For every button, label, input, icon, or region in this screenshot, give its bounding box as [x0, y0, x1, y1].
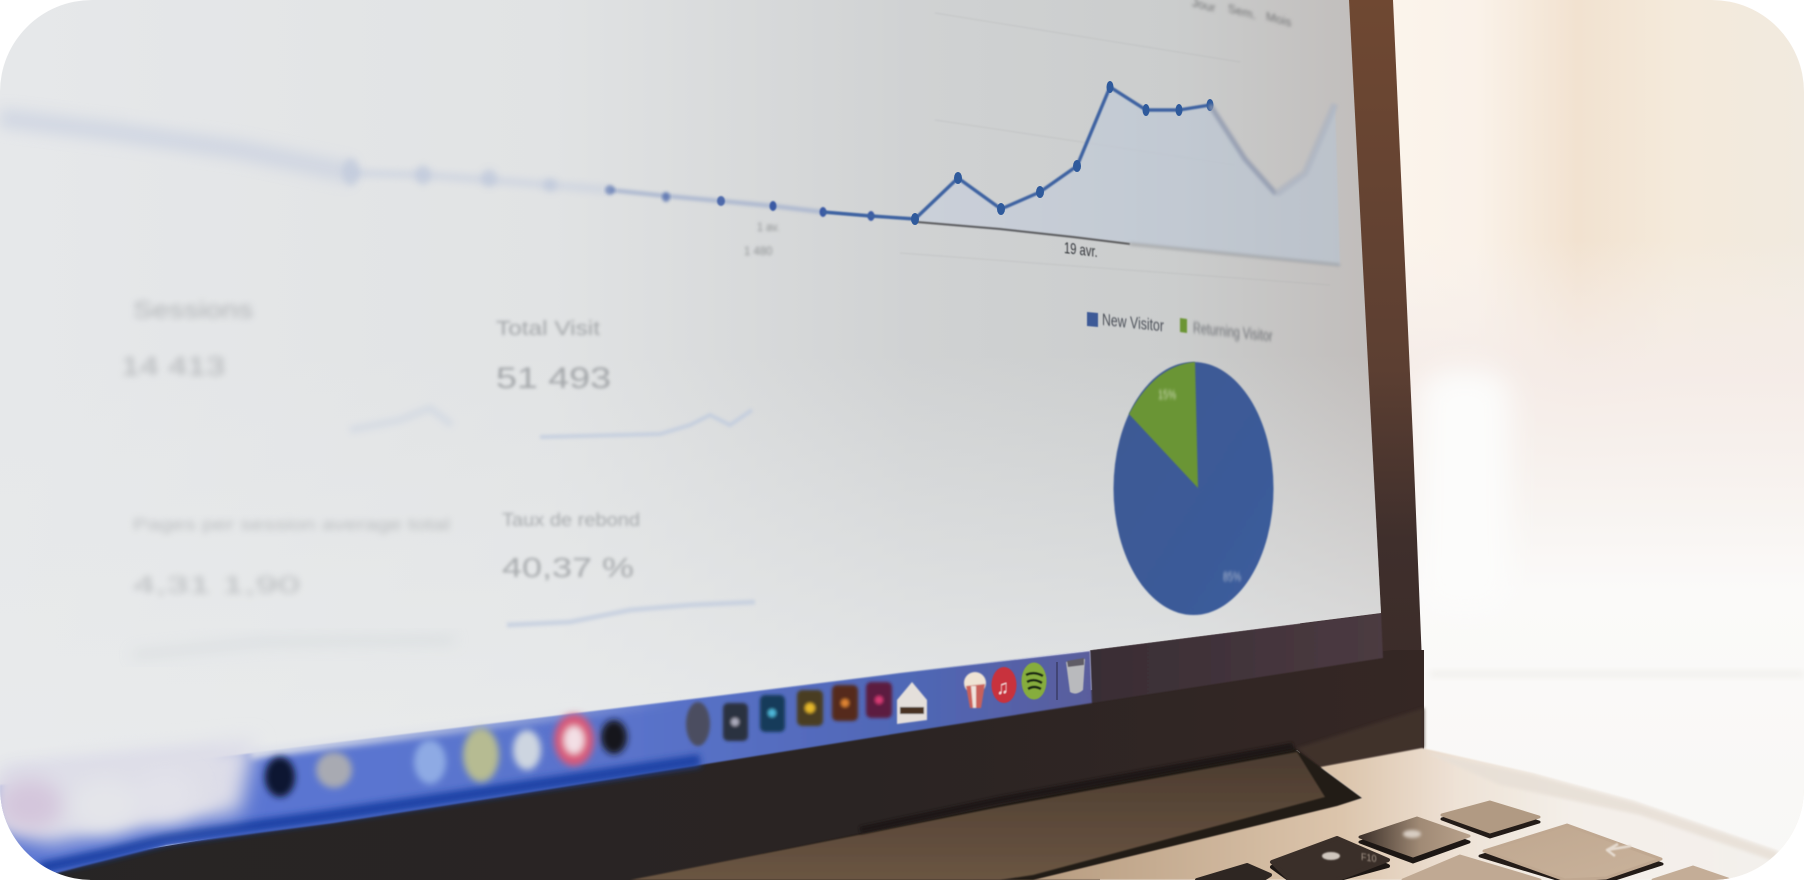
hinge [630, 752, 1325, 880]
dock icon: trash [1066, 658, 1085, 694]
keyboard deck [1000, 748, 1804, 880]
stat: total visit [496, 318, 611, 395]
key: dark function key: F10 [1361, 852, 1376, 865]
dock icon: music: ♫ [997, 676, 1008, 699]
room background [1300, 0, 1804, 880]
dock icons: middle row [686, 682, 892, 746]
stat: sessions: 14 413 [121, 351, 225, 381]
screen [0, 0, 1381, 785]
key: function key tan [1442, 802, 1539, 837]
key: backspace [1480, 825, 1662, 880]
legend swatch: new visitor [1087, 312, 1098, 327]
data line: in focus [823, 81, 1214, 225]
lower lid bezel [0, 650, 1424, 880]
stat: pages per session [133, 515, 450, 599]
sparkline 3 [507, 602, 755, 625]
pie chart [1114, 362, 1274, 615]
stat: bounce rate [502, 510, 640, 583]
legend label: returning visitor: Returning Visitor [1193, 319, 1273, 345]
dock icons: far left, out of focus [265, 714, 627, 797]
hinge shadow [620, 745, 1362, 880]
pie slice label 15%: 15% [1158, 389, 1176, 402]
pie slice: returning visitor 15% [1129, 362, 1198, 488]
dock [0, 651, 1092, 880]
dock top edge blur [250, 701, 680, 754]
sparkline 4 [133, 640, 455, 655]
laptop right bezel [1300, 0, 1424, 770]
blurred sparklines [133, 408, 755, 655]
chart baseline [917, 222, 1340, 265]
area under line [915, 87, 1340, 266]
top right controls: Mois [1266, 9, 1291, 30]
inner bezel panel beside dock [1090, 613, 1383, 703]
key: far left dark [1197, 865, 1270, 880]
stat: pages per session: 4,31 1,90 [133, 572, 300, 599]
legend label: new visitor: New Visitor [1102, 311, 1164, 336]
faint date label: 1 480 [744, 245, 773, 258]
stat: sessions [121, 297, 253, 381]
stat: bounce rate: Taux de rebond [502, 510, 640, 530]
legend swatch: returning visitor [1180, 318, 1187, 333]
pie slice: new visitor 85% [1114, 362, 1274, 615]
legend [1087, 311, 1273, 345]
stat: pages per session: Pages per session average total [133, 515, 450, 534]
stat: total visit: Total Visit [496, 318, 601, 340]
key: volume [1360, 818, 1469, 862]
key: dark function key [1272, 838, 1388, 880]
faint date label [744, 222, 780, 258]
dock icon: mail house [897, 682, 927, 724]
data points: far left blurred [342, 158, 557, 192]
key: lower middle [1403, 856, 1540, 880]
stat: sessions: Sessions [133, 297, 253, 324]
dock icon: popcorn [964, 672, 986, 708]
top right controls: Sem. [1228, 1, 1256, 22]
data points: left [605, 185, 874, 221]
chart grid lines [900, 13, 1330, 285]
key: lower right [1653, 867, 1728, 880]
dock left white blur [0, 740, 255, 844]
blurred statistics [121, 297, 640, 599]
dock icon: spotify [1022, 662, 1046, 700]
dock separator [1056, 662, 1058, 700]
sparkline 2 [540, 410, 752, 437]
lighter band on bottom of lid [1297, 708, 1424, 768]
dock lower blue edge [40, 760, 700, 868]
dock bar: full width [0, 651, 1092, 880]
data line: right, out of focus [1210, 104, 1335, 194]
faint date label: 1 av. [757, 222, 780, 234]
shadow line above hinge [860, 746, 1293, 830]
line chart: visitors [0, 0, 1340, 285]
top right controls [1192, 0, 1291, 30]
keyboard keys [1197, 802, 1728, 880]
dock icon: music [992, 667, 1016, 703]
date label: 19 avr. [1064, 238, 1098, 261]
sparkline 1 [350, 408, 452, 430]
pie slice label 85%: 85% [1223, 571, 1241, 584]
data line: left, out of focus [0, 118, 823, 212]
stat: bounce rate: 40,37 % [502, 552, 634, 583]
stat: total visit: 51 493 [496, 362, 611, 395]
